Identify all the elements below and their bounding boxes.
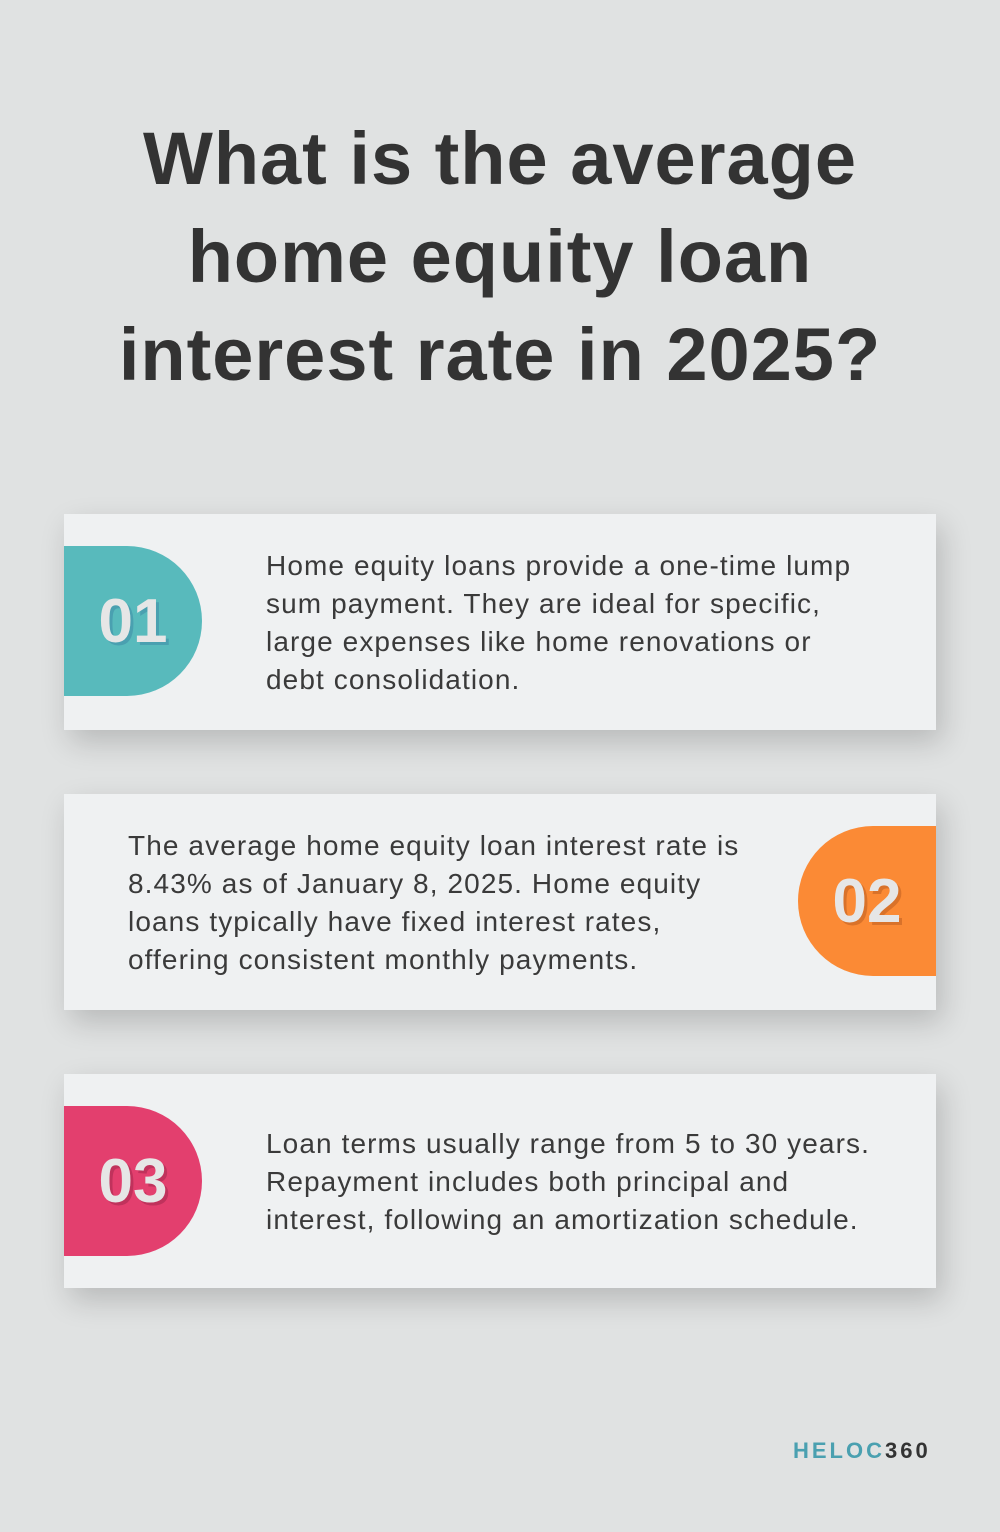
text 2: loans typically have fixed interest rates, bbox=[128, 906, 661, 937]
text 3: Repayment includes both principal and bbox=[266, 1166, 789, 1197]
badge 02 bbox=[798, 826, 936, 976]
badge 01: 01 bbox=[99, 586, 167, 656]
title: interest rate in 2025? bbox=[119, 313, 881, 396]
panel: card 3 bbox=[64, 1074, 936, 1288]
text 1: debt consolidation. bbox=[266, 664, 520, 695]
badge 03 bbox=[64, 1106, 202, 1256]
title: home equity loan bbox=[188, 215, 812, 298]
panel: card 2 bbox=[64, 794, 936, 1010]
badge 01 bbox=[64, 546, 202, 696]
text 3 bbox=[266, 1128, 870, 1235]
text 3: interest, following an amortization schedule. bbox=[266, 1204, 859, 1235]
logo: HELOC360 bbox=[793, 1438, 931, 1463]
text 1: large expenses like home renovations or bbox=[266, 626, 812, 657]
title bbox=[119, 117, 881, 396]
text 3: Loan terms usually range from 5 to 30 years. bbox=[266, 1128, 870, 1159]
text 2 bbox=[128, 830, 739, 975]
panel: card 1 bbox=[64, 514, 936, 730]
badge 02: 02 bbox=[833, 866, 901, 936]
text 1 bbox=[266, 550, 851, 695]
text 1: sum payment. They are ideal for specific, bbox=[266, 588, 821, 619]
title: What is the average bbox=[143, 117, 857, 200]
text 2: The average home equity loan interest rate is bbox=[128, 830, 739, 861]
badge 03: 03 bbox=[99, 1146, 167, 1216]
text 2: offering consistent monthly payments. bbox=[128, 944, 638, 975]
text 2: 8.43% as of January 8, 2025. Home equity bbox=[128, 868, 701, 899]
text 1: Home equity loans provide a one-time lump bbox=[266, 550, 851, 581]
